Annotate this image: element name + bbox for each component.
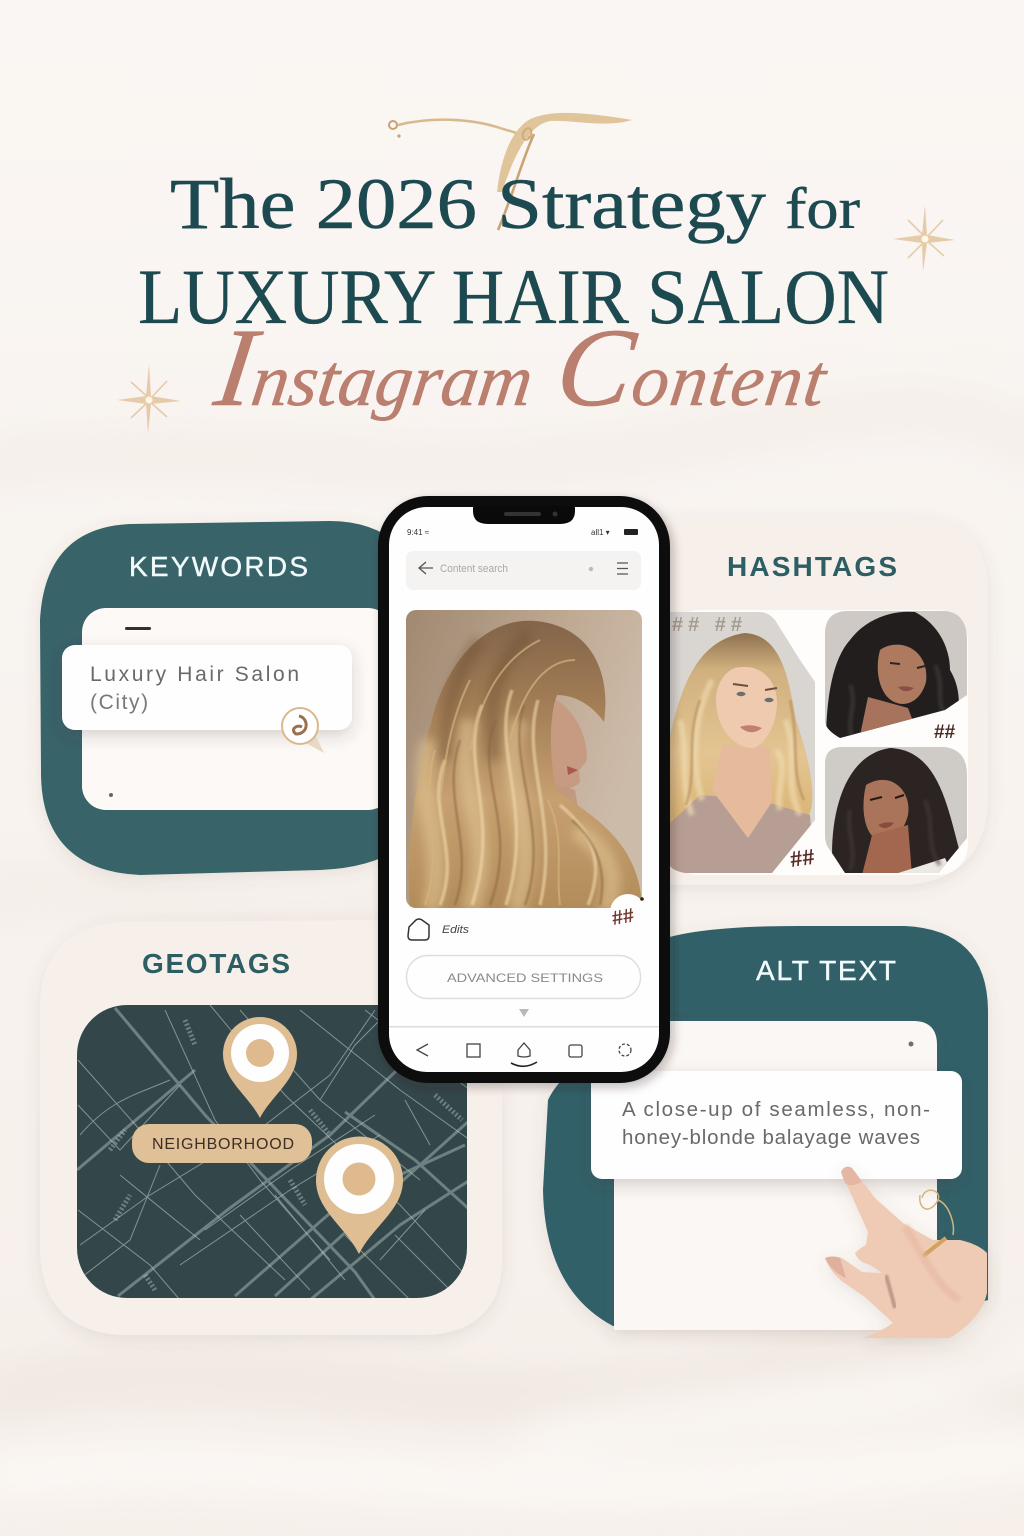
heading line 3: script: Instagram [208, 306, 543, 430]
heading: keywords: KEYWORDS [129, 551, 308, 582]
panel background [543, 926, 988, 1326]
advanced settings pill [406, 956, 640, 1017]
phone body [378, 496, 670, 1083]
icon: sparkle left [117, 364, 181, 434]
fine strands [439, 690, 596, 905]
search bar [406, 551, 641, 590]
bottom navigation icons [417, 1043, 631, 1066]
phone screen [389, 507, 659, 1072]
alt text first line: A close-up of seamless, non- [622, 1098, 930, 1121]
keyword text: Luxury Hair Salon [90, 663, 299, 686]
back card [82, 608, 392, 810]
heading line 1: The 2026 Strategy [170, 164, 766, 244]
decorative tick icon [125, 627, 151, 630]
notch [473, 506, 575, 524]
panel: alt text [543, 926, 988, 1338]
hash sticker on photo [610, 894, 646, 930]
hash sticker on photo: ## [610, 905, 636, 930]
nav divider [389, 1026, 659, 1028]
panel: geotags [40, 920, 502, 1335]
heading line 2: LUXURY HAIR SALON [138, 253, 889, 340]
gold thread decoration [920, 1190, 953, 1235]
search bar: Content search [440, 563, 508, 575]
collage backing [668, 610, 968, 875]
panel: keywords [40, 521, 400, 875]
panel background [40, 521, 400, 875]
photo: dark hair bottom [825, 747, 967, 880]
alt text card [591, 1071, 962, 1179]
label: neighborhood [132, 1124, 312, 1163]
icon: sparkle right [893, 205, 955, 272]
heading line 3: script [208, 306, 838, 430]
heading line 1: for: for [785, 176, 860, 241]
heading line 3: script: Content [550, 306, 838, 430]
icon: post shape [408, 919, 429, 940]
photo: dark hair top [825, 611, 967, 745]
icon: hand pointing [825, 1167, 987, 1338]
decorative dot [908, 1042, 914, 1046]
hash sticker top right: ## [934, 722, 956, 743]
hash sticker: ## [788, 844, 816, 872]
search input card [62, 645, 352, 730]
decorative dot [109, 793, 113, 797]
icon: map pin lower [316, 1136, 403, 1254]
status bar right: all1 ▾ [591, 528, 610, 537]
photo: blonde portrait [668, 610, 818, 880]
heading: geotags: GEOTAGS [142, 948, 290, 979]
heading: alt text: ALT TEXT [756, 955, 896, 986]
status bar left: 9:41 ≈ [407, 528, 430, 537]
hash marks on blonde photo: ## ## [672, 614, 747, 636]
keyword text second line: (City) [90, 691, 150, 714]
face in profile [551, 700, 587, 788]
panel background [640, 518, 988, 885]
panel: hashtags [640, 518, 988, 885]
panel background [40, 920, 502, 1335]
title block [117, 113, 955, 434]
icon: battery [624, 529, 638, 535]
heading: hashtags: HASHTAGS [727, 551, 897, 582]
back card [614, 1021, 937, 1330]
label: neighborhood: NEIGHBORHOOD [152, 1136, 294, 1153]
icon: magnifier [282, 708, 324, 753]
alt text second line: honey-blonde balayage waves [622, 1126, 920, 1149]
phone [378, 496, 670, 1083]
hair mass [409, 621, 642, 908]
map [77, 1000, 470, 1300]
icon: gold scissor flourish [389, 113, 632, 230]
icon: map pin upper [223, 1017, 297, 1118]
advanced settings pill: ADVANCED SETTINGS [447, 971, 603, 985]
post label: Edits [442, 924, 470, 936]
broad tonal waves [424, 720, 612, 910]
photo: blonde balayage hair [406, 610, 642, 910]
